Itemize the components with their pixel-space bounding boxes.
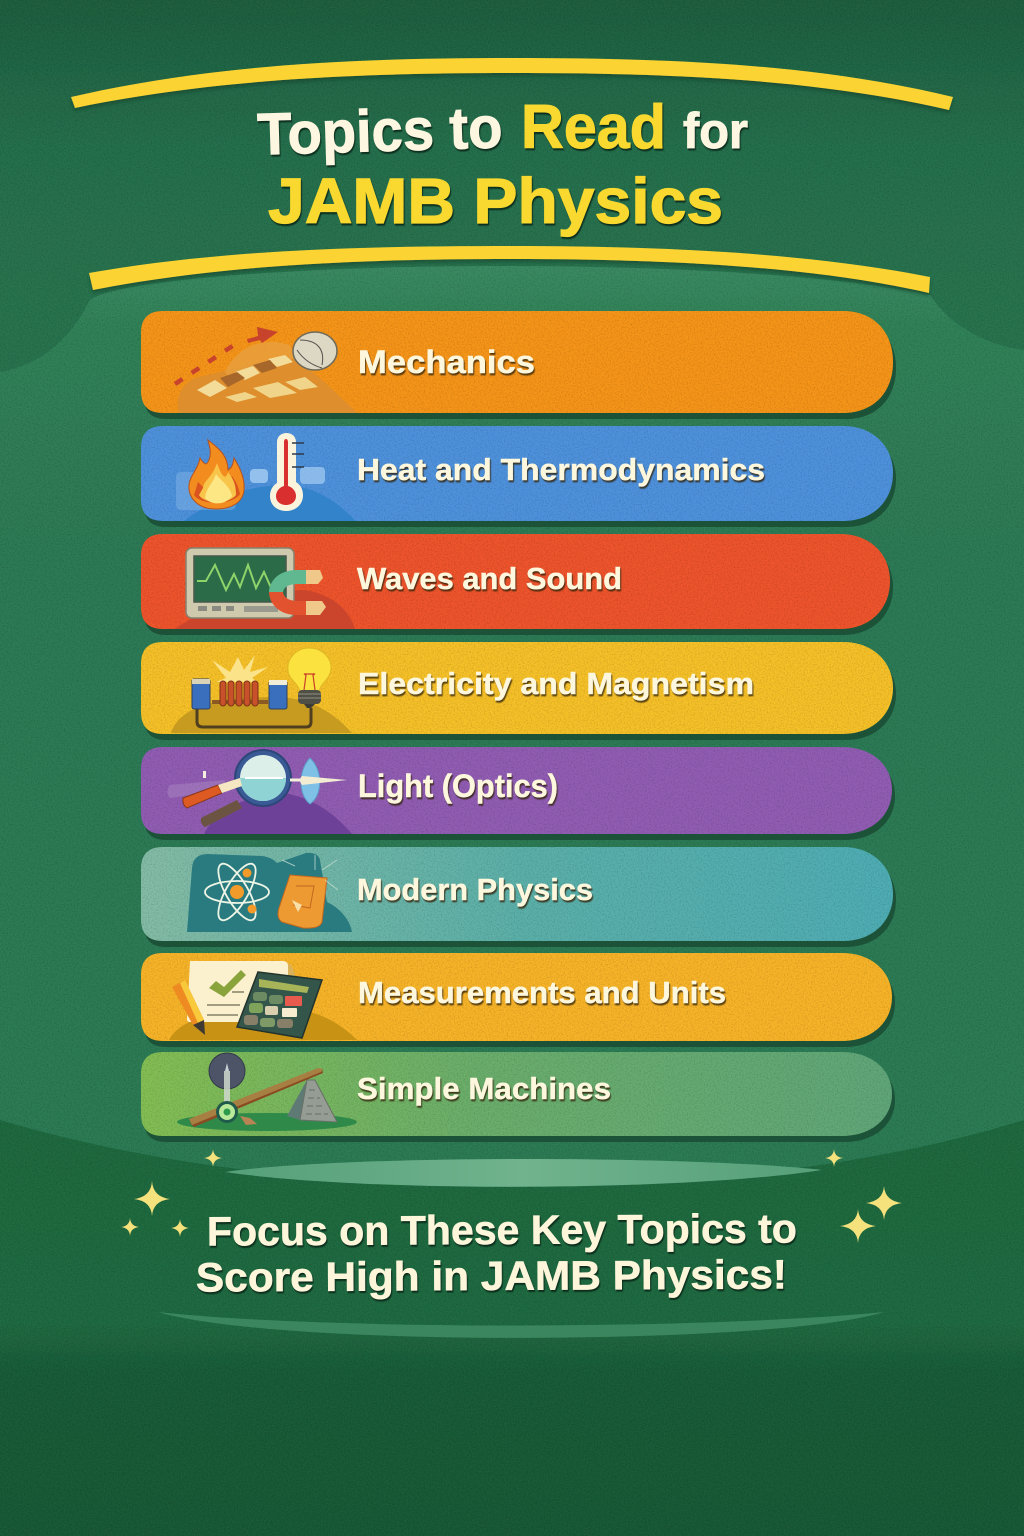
title (256, 93, 748, 237)
label: Electricity and Magnetism (358, 666, 754, 701)
top decorative arc (71, 58, 953, 110)
panel: measurements and units (141, 953, 895, 1047)
title line 1: for (683, 103, 748, 159)
icon: atom and radioactive tag (187, 853, 352, 932)
title line 1: Read (521, 93, 666, 162)
label: Mechanics (358, 344, 535, 380)
label: Waves and Sound (357, 561, 622, 596)
footer message (196, 1205, 797, 1301)
lower decorative arc (89, 246, 930, 293)
sparkles (121, 1149, 902, 1243)
label: Heat and Thermodynamics (357, 452, 765, 487)
footer line 1: Focus on These Key Topics to (207, 1205, 797, 1255)
title line 2: JAMB Physics (268, 165, 723, 237)
icon: notebook, pencil and calculator (169, 961, 357, 1040)
label: Modern Physics (357, 872, 593, 907)
panel: modern physics (141, 847, 896, 947)
icon: projectile on ramp (175, 327, 358, 413)
icon: flame and thermometer (176, 433, 356, 521)
panel: light optics (141, 747, 895, 840)
label: Simple Machines (357, 1071, 611, 1106)
panel: simple machines (141, 1052, 895, 1142)
icon: magnifier and lens (168, 750, 352, 834)
panel: heat and thermodynamics (141, 426, 896, 527)
title line 1: Topics to (256, 94, 503, 168)
icon: lever and fulcrum (177, 1053, 357, 1131)
icon: circuit with bulb (171, 648, 352, 733)
footer line 2: Score High in JAMB Physics! (196, 1251, 787, 1301)
label: Light (Optics) (358, 768, 558, 804)
icon: oscilloscope and magnet (175, 548, 355, 629)
label: Measurements and Units (358, 975, 726, 1010)
panel: electricity and magnetism (141, 642, 896, 740)
panel: mechanics (141, 311, 896, 419)
title line 1 (256, 93, 748, 168)
panel: waves and sound (141, 534, 893, 635)
